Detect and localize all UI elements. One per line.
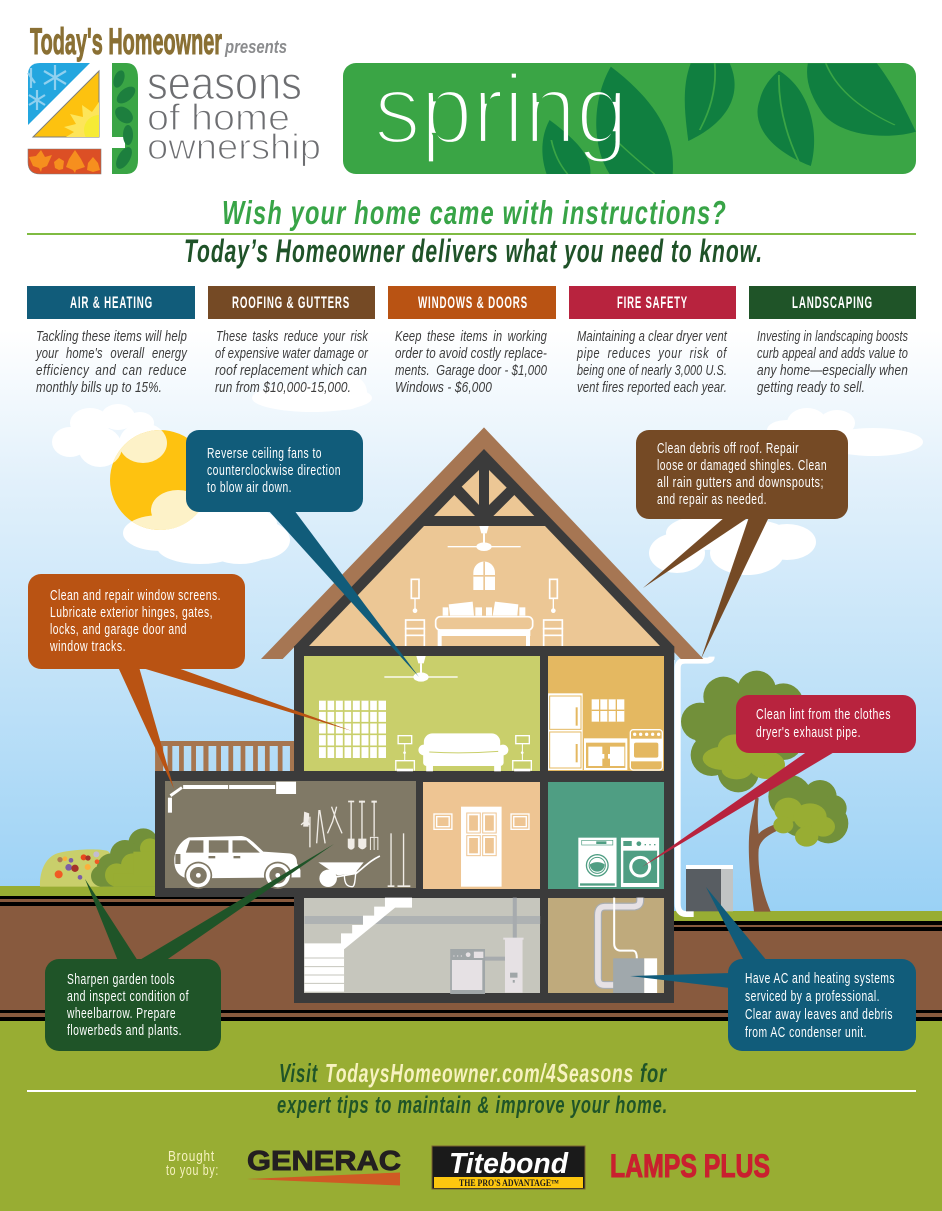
attic window <box>473 561 495 590</box>
category: roofing and gutters: of expensive water damage or <box>215 345 369 362</box>
callout: AC and heating: serviced by a professional. <box>745 988 880 1005</box>
tree <box>681 671 848 912</box>
callout: roof and gutters: Clean debris off roof. Repair <box>657 440 799 457</box>
callout: garden tools: wheelbarrow. Prepare <box>66 1005 176 1022</box>
living room <box>319 656 531 771</box>
callout: dryer lint: dryer's exhaust pipe. <box>756 724 861 741</box>
category: windows and doors: Windows - $6,000 <box>395 379 492 396</box>
category: air and heating: Tackling these items will help <box>36 328 187 345</box>
callout: garden tools <box>45 844 334 1051</box>
category: fire safety: being one of nearly 3,000 U.S. <box>577 362 727 379</box>
category: air and heating: monthly bills up to 15%. <box>36 379 162 396</box>
header: Today's Homeowner presents: Today's Homeowner <box>30 21 222 62</box>
footer call to action: TodaysHomeowner.com/4Seasons <box>325 1058 634 1088</box>
furnace <box>450 949 505 994</box>
category: windows and doors: Keep these items in working <box>395 328 547 345</box>
callout: AC and heating <box>630 887 916 1051</box>
fall orange section <box>28 149 101 174</box>
callout: garden tools: flowerbeds and plants. <box>67 1022 182 1039</box>
sky background <box>0 330 942 930</box>
sponsors label <box>166 1148 219 1179</box>
wheelbarrow <box>318 856 380 887</box>
logo wordmark: seasons of home ownership: seasons <box>147 57 302 109</box>
logo: Titebond: THE PRO'S ADVANTAGE™ <box>459 1178 559 1188</box>
category: fire safety: vent fires reported each year. <box>577 379 727 396</box>
callout: window screens <box>28 574 352 789</box>
category: roofing and gutters: roof replacement which can <box>215 362 367 379</box>
footer call to action: Visit <box>279 1058 318 1088</box>
callout: ceiling fans: Reverse ceiling fans to <box>207 445 322 462</box>
kitchen <box>548 693 662 770</box>
callout: ceiling fans <box>186 430 419 677</box>
category: windows and doors: WINDOWS & DOORS <box>418 294 528 312</box>
deck railing <box>155 741 295 772</box>
attic ceiling fan <box>448 526 521 551</box>
garden tools <box>301 801 410 887</box>
logo wordmark: seasons of home ownership: ownership <box>147 126 321 167</box>
category: windows and doors: ments. Garage door - $1,000 <box>395 362 547 379</box>
callout: roof and gutters: and repair as needed. <box>657 491 767 508</box>
bushes and flowers <box>40 828 160 887</box>
logo: Lamps Plus: LAMPS PLUS <box>610 1148 770 1184</box>
callout: dryer lint <box>642 695 916 867</box>
basement <box>304 898 540 994</box>
living room window <box>319 701 386 758</box>
sun <box>110 430 198 530</box>
category: landscaping: LANDSCAPING <box>792 294 873 312</box>
logo: Titebond: Titebond <box>449 1148 569 1180</box>
headline: Wish your home came with instructions? <box>222 194 727 231</box>
sponsors label: to you by: <box>166 1162 219 1179</box>
footer call to action: for <box>640 1058 667 1088</box>
category: fire safety: Maintaining a clear dryer vent <box>577 328 728 345</box>
callout: garden tools: and inspect condition of <box>67 988 189 1005</box>
spring title: spring <box>374 54 628 164</box>
category: roofing and gutters <box>208 286 375 396</box>
callout: window screens: Clean and repair window screens. <box>50 587 221 604</box>
category: landscaping: getting ready to sell. <box>757 379 865 396</box>
mechanical room <box>598 898 657 993</box>
spring banner <box>343 54 916 174</box>
category: windows and doors: order to avoid costly replace- <box>395 345 547 362</box>
banner leaves <box>542 63 916 174</box>
callout: window screens: locks, and garage door and <box>50 621 187 638</box>
attic bed and nightstands <box>406 579 562 646</box>
callout: garden tools: Sharpen garden tools <box>67 971 175 988</box>
category: fire safety <box>569 286 736 396</box>
category: air and heating: AIR & HEATING <box>70 294 153 312</box>
sofa and lamps <box>396 733 531 771</box>
logo: Generac: GENERAC <box>247 1145 401 1176</box>
logo wordmark: seasons of home ownership: of home <box>147 97 290 138</box>
house frame and floors <box>155 646 674 1003</box>
logo: 4 seasons <box>28 63 138 174</box>
water heater <box>503 898 524 993</box>
living room ceiling fan <box>384 656 458 682</box>
category: fire safety: FIRE SAFETY <box>617 294 688 312</box>
category: roofing and gutters: run from $10,000-15,000. <box>215 379 351 396</box>
callout: roof and gutters: all rain gutters and downspouts; <box>657 474 824 491</box>
footer call to action: expert tips to maintain & improve your home. <box>277 1092 668 1119</box>
category: air and heating: your home's overall energy <box>35 345 188 362</box>
logo: Titebond <box>432 1146 585 1189</box>
callout: roof and gutters: loose or damaged shingles. Clean <box>657 457 827 474</box>
garage <box>168 782 410 889</box>
category: landscaping: any home—especially when <box>757 362 908 379</box>
callout: window screens: window tracks. <box>49 638 126 655</box>
sponsors label: Brought <box>168 1148 215 1165</box>
logo wordmark: seasons of home ownership <box>147 57 321 167</box>
category: windows and doors <box>388 286 556 396</box>
callout: roof and gutters <box>636 430 848 659</box>
category: air and heating <box>27 286 195 396</box>
house roof and attic <box>261 427 703 660</box>
AC condenser unit and downspout <box>678 657 733 914</box>
entry door room <box>434 807 529 887</box>
footer call to action <box>27 1058 916 1119</box>
summer yellow section <box>32 70 100 138</box>
ground <box>0 886 942 1211</box>
winter blue section <box>28 63 90 125</box>
category: landscaping <box>749 286 916 396</box>
category: air and heating: efficiency and can reduce <box>36 362 187 379</box>
header: Today's Homeowner presents: presents <box>224 37 287 57</box>
category: fire safety: pipe reduces your risk of <box>576 345 728 362</box>
headline <box>27 194 916 269</box>
category: roofing and gutters: ROOFING & GUTTERS <box>232 294 350 312</box>
garage door track <box>168 782 296 813</box>
category: roofing and gutters: These tasks reduce your risk <box>216 328 369 345</box>
clouds <box>52 374 923 575</box>
laundry room <box>578 838 659 887</box>
stairs <box>304 898 412 992</box>
logo: Generac <box>247 1145 401 1186</box>
car <box>174 836 300 889</box>
green section <box>111 63 138 174</box>
callout: ceiling fans: to blow air down. <box>207 479 292 496</box>
callout: ceiling fans: counterclockwise direction <box>207 462 341 479</box>
callout: AC and heating: from AC condenser unit. <box>745 1024 867 1041</box>
dryer <box>621 838 659 887</box>
callout: window screens: Lubricate exterior hinges, gates, <box>50 604 213 621</box>
washer <box>578 838 617 887</box>
